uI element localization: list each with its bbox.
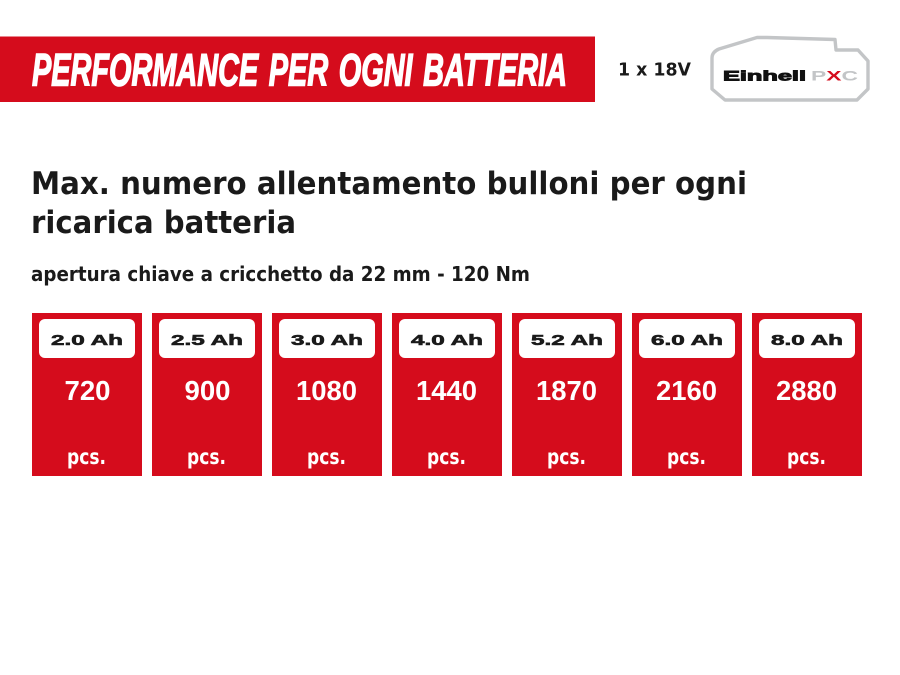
battery quantity label: 1 x 18V: [618, 60, 691, 80]
card: 5.2 Ah: 1870: [536, 375, 597, 406]
card: 6.0 Ah: pcs.: [667, 445, 706, 469]
heading: ricarica batteria: [31, 205, 296, 241]
card: 8.0 Ah: 2880: [776, 375, 837, 406]
card: 4.0 Ah: 4.0 Ah: [411, 332, 483, 349]
card: 8.0 Ah: 8.0 Ah: [771, 332, 843, 349]
title banner: PERFORMANCE PER OGNI BATTERIA: [32, 44, 567, 96]
card: 5.2 Ah: pcs.: [547, 445, 586, 469]
card: 2.5 Ah: [152, 313, 262, 476]
icon: Einhell PXC battery: Einhell: [723, 68, 806, 84]
card: 6.0 Ah: 6.0 Ah: [651, 332, 723, 349]
card: 2.5 Ah: pcs.: [187, 445, 226, 469]
icon: Einhell PXC battery: [712, 38, 868, 100]
icon: Einhell PXC battery: P X C: [811, 68, 858, 84]
card: 2.0 Ah: 2.0 Ah: [51, 332, 123, 349]
card: 6.0 Ah: 2160: [656, 375, 717, 406]
card: 2.5 Ah: 900: [184, 375, 230, 406]
card: 6.0 Ah: [632, 313, 742, 476]
card: 2.0 Ah: pcs.: [67, 445, 106, 469]
card: 4.0 Ah: [392, 313, 502, 476]
card: 2.0 Ah: [32, 313, 142, 476]
title banner: [0, 36, 595, 102]
card: 3.0 Ah: [272, 313, 382, 476]
heading: Max. numero allentamento bulloni per ogni: [31, 166, 747, 202]
card: 5.2 Ah: [512, 313, 622, 476]
card: 3.0 Ah: 3.0 Ah: [291, 332, 363, 349]
card: 2.0 Ah: 720: [64, 375, 110, 406]
card: 3.0 Ah: 1080: [296, 375, 357, 406]
card: 2.5 Ah: 2.5 Ah: [171, 332, 243, 349]
card: 4.0 Ah: pcs.: [427, 445, 466, 469]
heading: [31, 166, 747, 241]
card: 5.2 Ah: 5.2 Ah: [531, 332, 603, 349]
subheading: apertura chiave a cricchetto da 22 mm - 120 Nm: [31, 262, 530, 286]
card: 8.0 Ah: [752, 313, 862, 476]
card: 8.0 Ah: pcs.: [787, 445, 826, 469]
card: 4.0 Ah: 1440: [416, 375, 477, 406]
card: 3.0 Ah: pcs.: [307, 445, 346, 469]
